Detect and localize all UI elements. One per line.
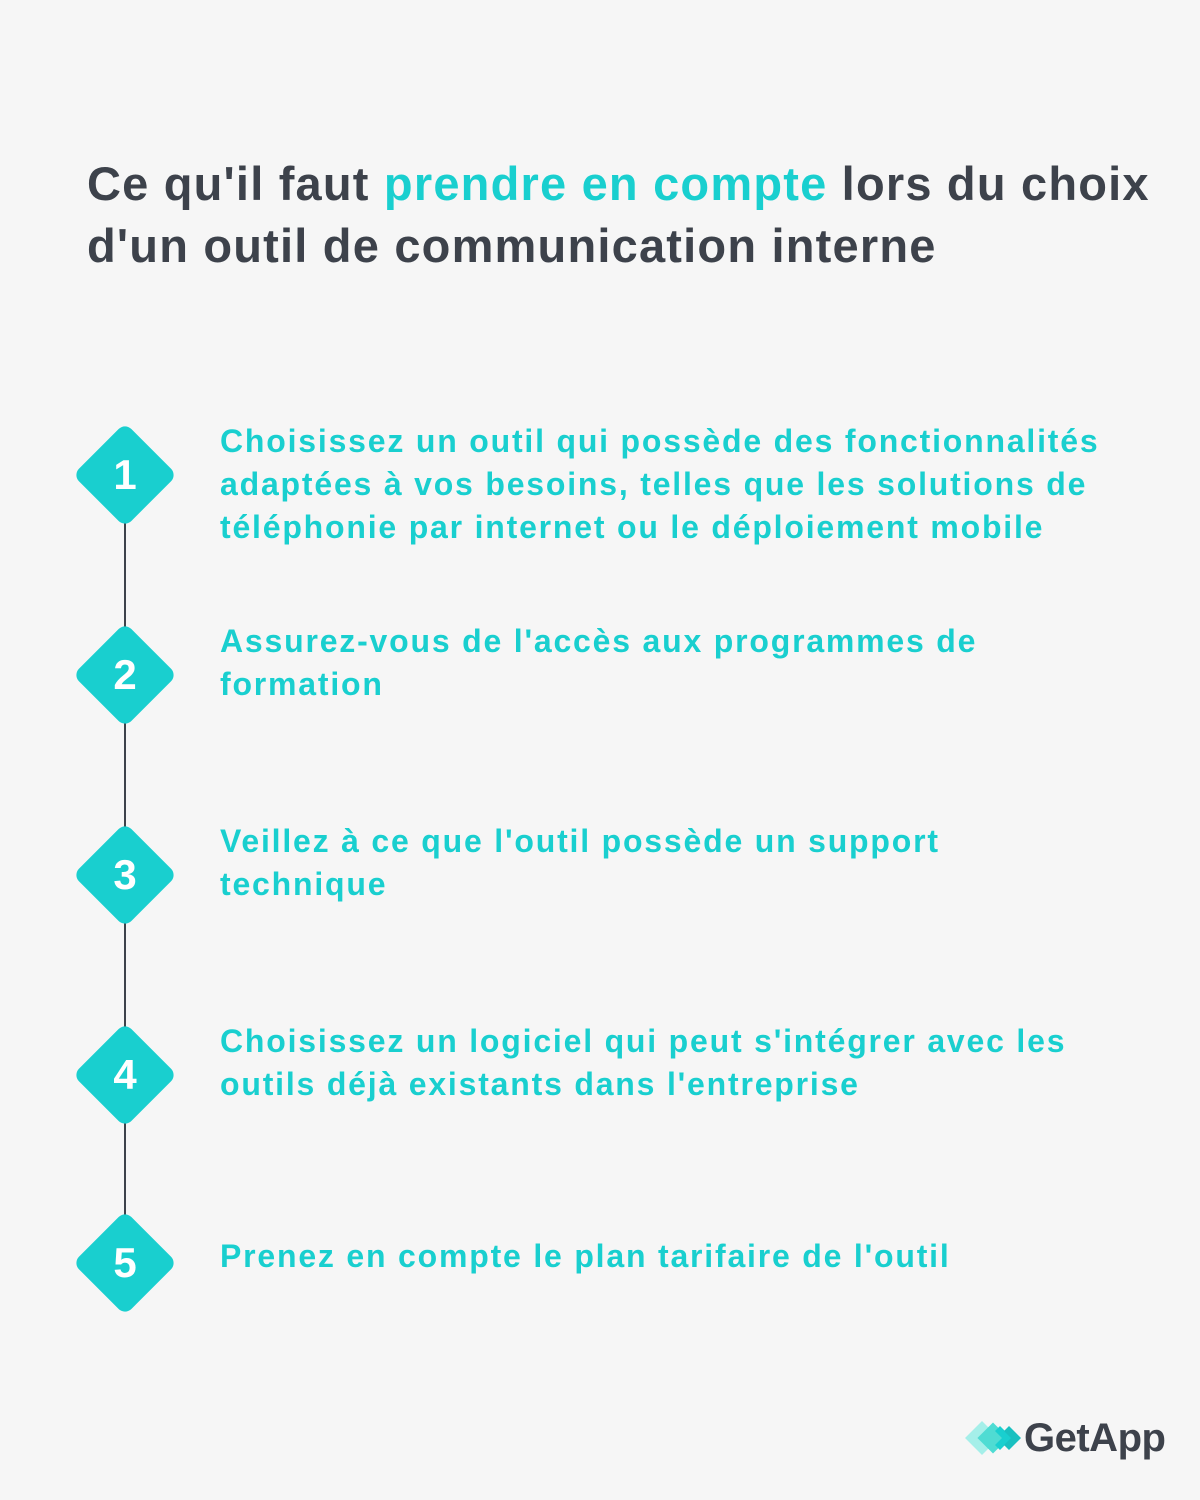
step 1 text: téléphonie par internet ou le déploiement mobile <box>220 509 1044 545</box>
step 1 text <box>220 423 1099 545</box>
step 2 text <box>220 623 977 702</box>
step 4 diamond <box>73 1023 177 1127</box>
step 3 text: technique <box>220 866 387 902</box>
step 4 number: 4 <box>113 1051 137 1098</box>
step 3 number: 3 <box>113 851 137 898</box>
step 2 text: Assurez-vous de l'accès aux programmes de <box>220 623 977 659</box>
title: Ce qu'il faut prendre en compte lors du choix <box>87 157 1150 210</box>
step 3 text <box>220 823 940 902</box>
step 2 text: formation <box>220 666 384 702</box>
step 3 diamond <box>73 823 177 927</box>
step 1 text: adaptées à vos besoins, telles que les solutions de <box>220 466 1087 502</box>
step 1 text: Choisissez un outil qui possède des fonctionnalités <box>220 423 1099 459</box>
step 4 text <box>220 1023 1066 1102</box>
step 1 number: 1 <box>113 451 137 498</box>
logo: GetApp: GetApp <box>1024 1416 1165 1460</box>
timeline line <box>124 520 126 1220</box>
step 4 text: Choisissez un logiciel qui peut s'intégrer avec les <box>220 1023 1066 1059</box>
step 5 text: Prenez en compte le plan tarifaire de l'outil <box>220 1238 951 1274</box>
step 4 text: outils déjà existants dans l'entreprise <box>220 1066 860 1102</box>
step 1 diamond <box>73 423 177 527</box>
step 2 diamond <box>73 623 177 727</box>
step 5 diamond <box>73 1211 177 1315</box>
step 3 text: Veillez à ce que l'outil possède un support <box>220 823 940 859</box>
title <box>87 157 1150 272</box>
title: d'un outil de communication interne <box>87 219 937 272</box>
step 5 number: 5 <box>113 1239 137 1286</box>
step 2 number: 2 <box>113 651 137 698</box>
